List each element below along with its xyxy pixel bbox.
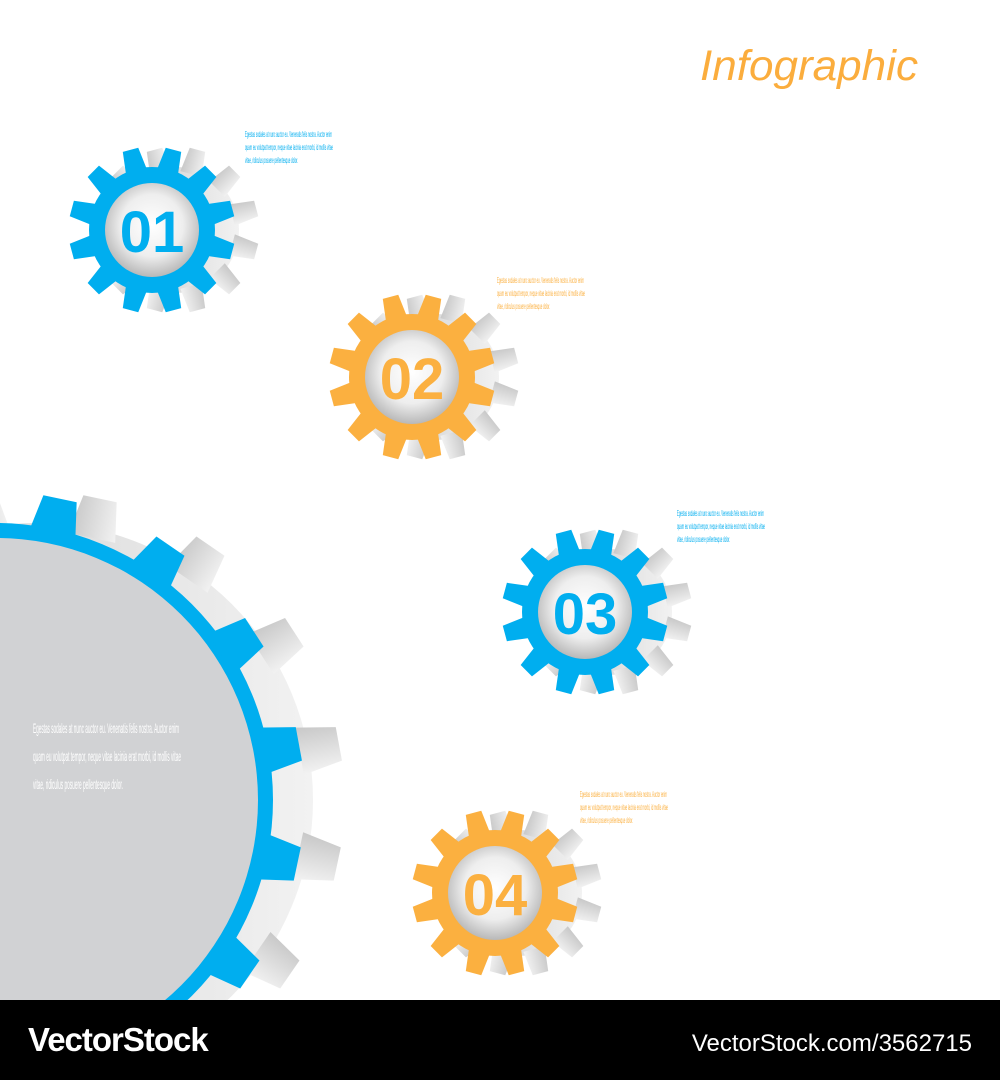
text 02: vitae, ridiculus posuere pellentesque dolor. xyxy=(497,302,550,311)
text: quam eu volutpat tempor, neque vitae lacinia erat morbi, id mollis vitae xyxy=(580,803,668,812)
gear 02 xyxy=(329,294,519,460)
footer: VectorStock.com/3562715 xyxy=(692,1030,972,1057)
big gear xyxy=(0,493,343,1077)
title: Infographic xyxy=(700,42,918,90)
gear 03: 03 xyxy=(553,582,617,647)
big gear inner panel xyxy=(0,538,258,1062)
footer xyxy=(0,1000,1000,1080)
text: Egestas sodales at nunc auctor eu. Venenatis felis nostra. Auctor enim xyxy=(580,790,667,799)
text: Egestas sodales at nunc auctor eu. Venenatis felis nostra. Auctor enim xyxy=(497,276,584,285)
big gear text: vitae, ridiculus posuere pellentesque dolor. xyxy=(33,776,123,792)
gear 04 xyxy=(412,810,602,976)
gear 04: 04 xyxy=(463,863,527,928)
text 01: vitae, ridiculus posuere pellentesque dolor. xyxy=(245,156,298,165)
big gear: quam eu volutpat tempor, neque vitae lacinia erat morbi, id mollis vitae xyxy=(33,748,181,764)
text 04: vitae, ridiculus posuere pellentesque dolor. xyxy=(580,816,633,825)
gear 01: 01 xyxy=(120,200,184,265)
gear 02: 02 xyxy=(380,347,444,412)
gear 03 xyxy=(502,529,692,695)
text: quam eu volutpat tempor, neque vitae lacinia erat morbi, id mollis vitae xyxy=(497,289,585,298)
text: Egestas sodales at nunc auctor eu. Venenatis felis nostra. Auctor enim xyxy=(245,130,332,139)
text 03: vitae, ridiculus posuere pellentesque dolor. xyxy=(677,535,730,544)
gear 01 xyxy=(69,147,259,313)
text: quam eu volutpat tempor, neque vitae lacinia erat morbi, id mollis vitae xyxy=(245,143,333,152)
text: quam eu volutpat tempor, neque vitae lacinia erat morbi, id mollis vitae xyxy=(677,522,765,531)
text: Egestas sodales at nunc auctor eu. Venenatis felis nostra. Auctor enim xyxy=(677,509,764,518)
footer: VectorStock xyxy=(28,1021,209,1058)
big gear: Egestas sodales at nunc auctor eu. Venenatis felis nostra. Auctor enim xyxy=(33,720,179,736)
